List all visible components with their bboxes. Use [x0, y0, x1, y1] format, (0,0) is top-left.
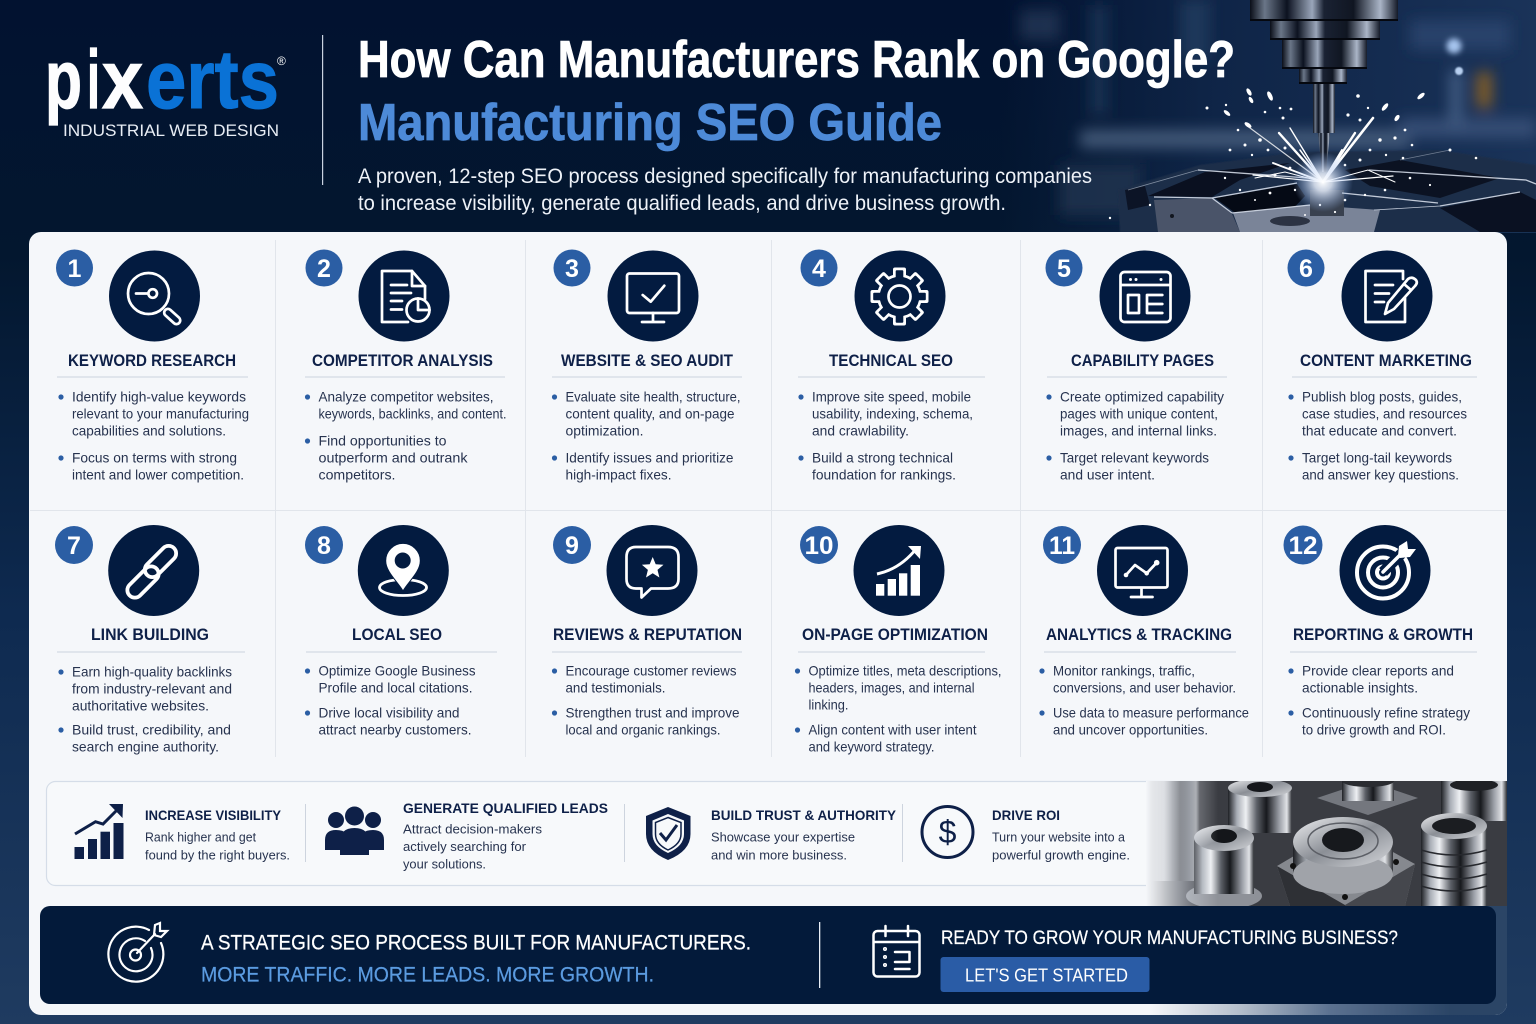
- badge 6: 6: [1299, 255, 1313, 283]
- icon: magnifier: [109, 250, 200, 342]
- center block: [1277, 852, 1415, 906]
- badge 10: 10: [804, 532, 834, 560]
- subtitle: to increase visibility, generate qualified leads, and drive business growth.: [358, 191, 1006, 215]
- logo: INDUSTRIAL WEB DESIGN: [63, 121, 279, 140]
- bullets: and uncover opportunities.: [1053, 722, 1208, 738]
- bullets: usability, indexing, schema,: [812, 406, 973, 422]
- header photo: CNC spindle with sparks: [1000, 0, 1536, 233]
- step 2: competitor analysis: [305, 250, 506, 482]
- bullets: actionable insights.: [1302, 680, 1418, 696]
- text: INCREASE VISIBILITY: [145, 807, 282, 823]
- benefit: increase visibility: [74, 804, 290, 862]
- heading: ON-PAGE OPTIMIZATION: [802, 626, 988, 644]
- logo: ®: [277, 54, 286, 68]
- heading: REPORTING & GROWTH: [1293, 626, 1473, 644]
- bullets: Drive local visibility and: [318, 706, 460, 720]
- bullets: Target long-tail keywords: [1302, 450, 1452, 466]
- icon: dollar circle: [922, 806, 973, 858]
- text: [403, 800, 608, 872]
- main white panel: [29, 232, 1507, 1015]
- icon: shield with check: [646, 807, 690, 860]
- bullets: and crawlability.: [812, 424, 909, 438]
- bullets: [1046, 390, 1224, 482]
- bullets: Focus on terms with strong: [72, 450, 237, 466]
- bullets: capabilities and solutions.: [72, 424, 226, 438]
- spindle: [1250, 0, 1398, 172]
- badge 11: [1043, 526, 1081, 564]
- title: How Can Manufacturers Rank on Google?: [358, 30, 1235, 88]
- bullets: relevant to your manufacturing: [72, 406, 249, 422]
- step 11: analytics and tracking: [1039, 525, 1249, 738]
- badge 5: 5: [1057, 255, 1071, 283]
- step 5: capability pages: [1046, 250, 1227, 482]
- bullets: foundation for rankings.: [812, 468, 956, 482]
- step 1: keyword research: [56, 250, 249, 482]
- badge 1: 1: [68, 255, 82, 283]
- cta text: READY TO GROW YOUR MANUFACTURING BUSINESS?: [941, 927, 1398, 949]
- benefits strip box: [46, 782, 1246, 886]
- bullets: Build trust, credibility, and: [72, 722, 231, 738]
- logo: [45, 33, 286, 140]
- bullets: [552, 390, 740, 482]
- badge 8: [305, 526, 343, 564]
- bullets: Continuously refine strategy: [1302, 706, 1470, 720]
- text: found by the right buyers.: [145, 848, 290, 862]
- bullets: Publish blog posts, guides,: [1302, 390, 1462, 404]
- right cylinder: [1421, 826, 1487, 906]
- bullets: Build a strong technical: [812, 450, 953, 466]
- bullets: Target relevant keywords: [1060, 450, 1209, 466]
- button: LET'S GET STARTED: [965, 964, 1128, 986]
- bullets: search engine authority.: [72, 740, 219, 754]
- badge 3: 3: [565, 255, 579, 283]
- text: Rank higher and get: [145, 830, 256, 844]
- back parts: [1156, 781, 1200, 881]
- front left cylinder: [1186, 888, 1262, 906]
- bullets: to drive growth and ROI.: [1302, 722, 1446, 738]
- icon: monitor with line chart: [1097, 525, 1188, 616]
- text: actively searching for: [403, 839, 527, 854]
- bullets: competitors.: [318, 468, 396, 482]
- heading: KEYWORD RESEARCH: [68, 352, 236, 370]
- benefit: generate qualified leads: [325, 800, 608, 872]
- step 9: reviews and reputation: [552, 525, 742, 738]
- sparks: [1246, 118, 1395, 182]
- bullets: authoritative websites.: [72, 698, 209, 714]
- icon: target: [108, 923, 167, 982]
- step 7: link building: [55, 525, 245, 754]
- badge 5: [1046, 250, 1082, 286]
- icon: map pin: [358, 525, 449, 616]
- badge 7: 7: [67, 532, 81, 560]
- icon: target with arrow: [1340, 525, 1430, 616]
- badge 7: [55, 526, 93, 564]
- subtitle: A proven, 12-step SEO process designed specifically for manufacturing companies: [358, 164, 1092, 188]
- badge 9: [553, 526, 591, 564]
- badge 2: [306, 250, 342, 286]
- bullets: content quality, and on-page: [566, 406, 734, 422]
- heading: ANALYTICS & TRACKING: [1046, 626, 1232, 644]
- bullets: linking.: [808, 698, 848, 712]
- bullets: and keyword strategy.: [808, 740, 934, 754]
- bullets: [798, 390, 973, 482]
- step 6: content marketing: [1288, 250, 1477, 482]
- bullets: Use data to measure performance: [1053, 706, 1249, 720]
- text: BUILD TRUST & AUTHORITY: [711, 807, 897, 823]
- text: powerful growth engine.: [992, 848, 1130, 862]
- bullets: Provide clear reports and: [1302, 664, 1454, 678]
- bullets: that educate and convert.: [1302, 424, 1457, 438]
- heading: COMPETITOR ANALYSIS: [312, 352, 493, 370]
- icon: document and pencil: [1342, 250, 1432, 342]
- badge 4: 4: [812, 255, 826, 283]
- bullets: Improve site speed, mobile: [812, 390, 971, 404]
- bullets: and testimonials.: [566, 680, 666, 696]
- logo word: pixerts: i: [87, 33, 100, 126]
- text: GENERATE QUALIFIED LEADS: [403, 800, 608, 816]
- badge 11: 11: [1049, 532, 1075, 560]
- bullets: [305, 664, 476, 738]
- step 3: website and seo audit: [552, 250, 742, 482]
- statement text: MORE TRAFFIC. MORE LEADS. MORE GROWTH.: [201, 964, 654, 986]
- bullets: Earn high-quality backlinks: [72, 664, 232, 680]
- text: Turn your website into a: [992, 830, 1126, 844]
- bullets: [552, 664, 740, 738]
- icon: growth chart: [74, 804, 124, 859]
- logo word: pixerts: [45, 33, 143, 126]
- icon: calendar: [874, 926, 920, 976]
- logo word: pixerts: x: [102, 33, 143, 126]
- bullets: Optimize Google Business: [318, 664, 476, 678]
- heading: TECHNICAL SEO: [829, 352, 953, 370]
- button: [940, 957, 1150, 992]
- text: [992, 807, 1130, 862]
- title: Manufacturing SEO Guide: [358, 93, 942, 151]
- bullets: Evaluate site health, structure,: [566, 390, 740, 404]
- bullets: headers, images, and internal: [808, 680, 974, 696]
- step 12: reporting and growth: [1284, 525, 1477, 738]
- bullets: pages with unique content,: [1060, 406, 1218, 422]
- bullets: case studies, and resources: [1302, 406, 1467, 422]
- text: Showcase your expertise: [711, 830, 855, 844]
- benefit: build trust and authority: [646, 807, 897, 862]
- bullets: images, and internal links.: [1060, 424, 1217, 438]
- badge 12: [1284, 526, 1322, 564]
- text: Attract decision-makers: [403, 822, 543, 836]
- panel bottom strip fade: [1100, 906, 1507, 1015]
- heading: LOCAL SEO: [352, 626, 442, 644]
- heading: LINK BUILDING: [91, 626, 209, 644]
- icon: browser layout: [1100, 250, 1190, 342]
- logo: erts: [146, 33, 279, 126]
- subtitle: [358, 164, 1092, 215]
- badge 2: 2: [317, 255, 331, 283]
- benefit: drive roi: [922, 806, 1130, 862]
- icon: gear: [854, 250, 946, 342]
- bullets: Analyze competitor websites,: [318, 390, 494, 404]
- icon: chain link: [108, 525, 199, 616]
- text: [145, 807, 290, 862]
- photo: machined metal parts: [1146, 775, 1507, 909]
- bullets: Optimize titles, meta descriptions,: [808, 664, 1002, 678]
- bullets: [1288, 664, 1470, 738]
- badge 12: 12: [1288, 532, 1318, 560]
- bullets: outperform and outrank: [318, 450, 468, 466]
- bullets: Profile and local citations.: [318, 680, 472, 696]
- bullets: optimization.: [566, 424, 644, 438]
- icon: dollar circle: $: [939, 814, 957, 850]
- badge 10: [800, 526, 838, 564]
- icon: speech bubble with star: [606, 525, 698, 616]
- bullets: keywords, backlinks, and content.: [318, 406, 506, 422]
- heading: CONTENT MARKETING: [1300, 352, 1472, 370]
- badge 1: [56, 250, 93, 286]
- bullets: [1039, 664, 1249, 738]
- bullets: Monitor rankings, traffic,: [1053, 664, 1195, 678]
- bullets: Find opportunities to: [318, 434, 446, 448]
- bullets: Identify issues and prioritize: [566, 450, 734, 466]
- bullets: Identify high-value keywords: [72, 390, 246, 404]
- statement text: [201, 932, 751, 986]
- step 8: local seo: [305, 525, 497, 738]
- bullets: and user intent.: [1060, 468, 1155, 482]
- bullets: [58, 664, 232, 754]
- text: and win more business.: [711, 848, 847, 862]
- icon: document with pie chart: [358, 250, 450, 342]
- bullets: attract nearby customers.: [318, 722, 472, 738]
- heading: REVIEWS & REPUTATION: [553, 626, 742, 644]
- logo word: pixerts: p: [45, 33, 82, 126]
- bullets: Create optimized capability: [1060, 390, 1224, 404]
- badge 3: [554, 250, 590, 286]
- header divider: [322, 35, 323, 185]
- bullets: [58, 390, 249, 482]
- bullets: intent and lower competition.: [72, 468, 244, 482]
- icon: bar chart with arrow: [854, 525, 944, 616]
- text: your solutions.: [403, 856, 486, 872]
- bullets: [795, 664, 1002, 754]
- text: [711, 807, 897, 862]
- bullets: conversions, and user behavior.: [1053, 680, 1236, 696]
- icon: monitor with check: [608, 250, 698, 342]
- badge 8: 8: [317, 532, 331, 560]
- bullets: [1288, 390, 1467, 482]
- badge 9: 9: [565, 532, 579, 560]
- bottom call-to-action bar: [40, 906, 1496, 1004]
- bullets: from industry-relevant and: [72, 682, 232, 696]
- heading: WEBSITE & SEO AUDIT: [561, 352, 733, 370]
- badge 6: [1288, 250, 1324, 286]
- icon: people: [325, 806, 384, 855]
- bullets: Align content with user intent: [808, 722, 977, 738]
- statement text: A STRATEGIC SEO PROCESS BUILT FOR MANUFACTURERS.: [201, 932, 751, 954]
- bullets: Strengthen trust and improve: [566, 706, 740, 720]
- bullets: high-impact fixes.: [566, 468, 672, 482]
- step 4: technical seo: [798, 250, 985, 482]
- bullets: local and organic rankings.: [566, 722, 720, 738]
- bullets: and answer key questions.: [1302, 468, 1459, 482]
- badge 4: [800, 250, 838, 286]
- text: DRIVE ROI: [992, 807, 1060, 823]
- step 10: on-page optimization: [795, 525, 1002, 754]
- bullets: Encourage customer reviews: [566, 664, 737, 678]
- bullets: [305, 390, 506, 482]
- heading: CAPABILITY PAGES: [1071, 352, 1214, 370]
- title: [358, 30, 1235, 151]
